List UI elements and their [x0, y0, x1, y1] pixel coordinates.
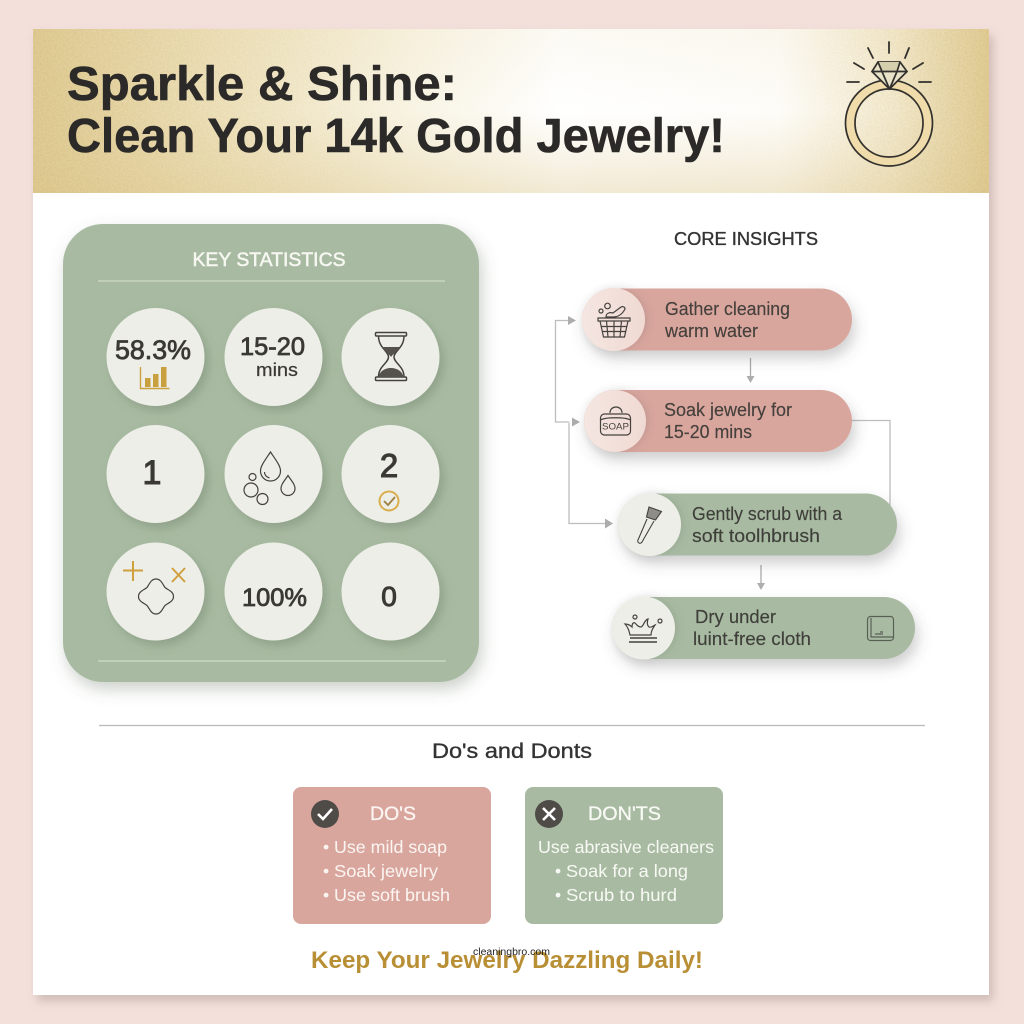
step text: luint-free cloth [693, 629, 811, 649]
icon: cross badge [535, 800, 563, 828]
heading: do's and donts: Do's and Donts [432, 740, 592, 763]
step text [692, 504, 843, 546]
step 4: dry [612, 596, 915, 660]
step 1: gather cleaning [582, 288, 852, 351]
step text: 15-20 mins [664, 422, 752, 442]
step text [693, 607, 811, 649]
stat: 100% [224, 542, 322, 640]
panel: key statistics [63, 224, 479, 682]
stat: 2 with check [342, 425, 440, 523]
watermark: cleaningbro.com [473, 947, 550, 958]
icon: soap: SOAP [602, 422, 629, 432]
stat: 1 [106, 425, 204, 523]
icon: diamond ring [846, 42, 933, 166]
don'ts list [538, 837, 714, 905]
icon: cloth [868, 616, 894, 640]
header banner [33, 29, 989, 193]
panel: do's [293, 787, 491, 924]
stat: 0: 0 [381, 581, 397, 612]
stat: 2 with check: 2 [380, 447, 398, 484]
icon: soap [584, 390, 646, 452]
icon: hourglass [342, 308, 440, 406]
don'ts list: • [555, 861, 561, 881]
stat: 58.3% [106, 308, 204, 406]
step text [664, 299, 790, 341]
do's list: • [323, 837, 329, 857]
stat: 15-20 mins [224, 308, 322, 406]
stat: 15-20 mins: mins [256, 360, 298, 380]
do's list: Soak jewelry [334, 861, 438, 881]
don'ts heading: DON'TS [588, 804, 661, 825]
icon: basket [582, 288, 645, 351]
step 2: soak jewelry [584, 390, 852, 452]
don'ts list: Scrub to hurd [566, 885, 677, 905]
stat: 1: 1 [143, 454, 161, 492]
step text: Soak jewelry for [664, 400, 792, 420]
do's list [323, 837, 450, 905]
step text: soft toolhbrush [692, 526, 820, 546]
icon: water drops and bubbles [224, 425, 322, 523]
do's list: • [323, 861, 329, 881]
don'ts list: Use abrasive cleaners [538, 837, 714, 857]
step text: Gently scrub with a [692, 504, 843, 524]
icon: check badge [311, 800, 339, 828]
stat: 100%: 100% [242, 584, 307, 612]
stat: 0 [342, 542, 440, 640]
title: Sparkle & Shine: [67, 58, 457, 111]
panel heading: KEY STATISTICS [192, 250, 346, 271]
icon: sparkle and gem outline [106, 542, 204, 640]
step 3: gently scrub [618, 493, 897, 556]
do's heading: DO'S [370, 804, 416, 825]
don'ts list: Soak for a long [566, 861, 688, 881]
step text [664, 400, 792, 442]
stat: 58.3%: 58.3% [115, 335, 191, 365]
step text: Gather cleaning [665, 299, 790, 319]
title: Clean Your 14k Gold Jewelry! [67, 110, 725, 163]
step text: Dry under [695, 607, 776, 627]
stat: 15-20 mins: 15-20 [240, 333, 305, 361]
do's list: Use mild soap [334, 837, 447, 857]
don'ts list: • [555, 885, 561, 905]
title [67, 58, 725, 163]
step text: warm water [664, 321, 758, 341]
closing tagline: Keep Your Jewelry Dazzling Daily! [311, 947, 703, 974]
flow connectors [556, 316, 890, 590]
icon: splash [612, 596, 675, 660]
panel: don'ts [525, 787, 723, 924]
heading: core insights: CORE INSIGHTS [674, 229, 818, 249]
do's list: Use soft brush [334, 885, 450, 905]
icon: toothbrush [618, 493, 681, 556]
do's list: • [323, 885, 329, 905]
